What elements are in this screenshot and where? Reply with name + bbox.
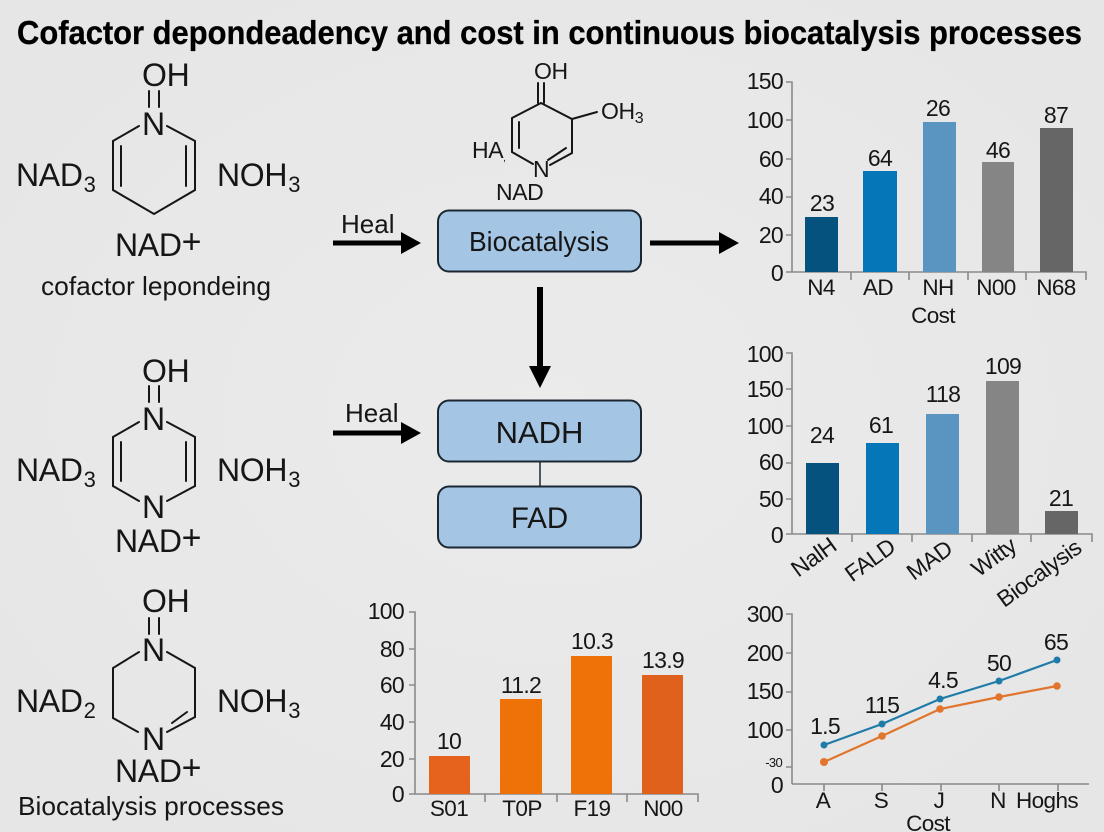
molecule: middle left NAD+ structure: OH [142,353,189,389]
bar chart: bottom center orange: S01 [430,796,468,821]
molecule: middle left NAD+ structure: + [182,519,201,557]
bar chart: top right cost: NH [922,275,954,300]
bar chart: middle right: 21 [1049,485,1073,511]
bar chart: bottom center orange: 40 [380,709,404,735]
bar chart: middle right: 60 [759,449,783,475]
bar chart: middle right: 150 [747,376,783,402]
bar chart: top right cost: N4 [807,275,835,300]
label: Heal (middle): Heal [345,398,398,428]
box: NADH: NADH [496,415,583,450]
bar chart: middle right: MAD [902,535,957,585]
caption: cofactor lepondeing: cofactor lepondeing [41,271,271,301]
bar chart: middle right: 109 [985,353,1021,379]
molecule: middle left NAD+ structure: 3 [84,467,96,492]
box: Biocatalysis [438,210,641,272]
line chart: bottom right: N [990,788,1006,813]
molecule: bottom left NAD+ structure: + [182,749,201,787]
line chart: bottom right: 65 [1044,629,1068,655]
bar chart: bottom center orange: T0P [502,796,542,821]
molecule: middle left NAD+ structure: NOH [217,452,287,488]
molecule: middle left NAD+ structure: 3 [288,467,300,492]
bar chart: middle right: 100 [747,413,783,439]
caption: Biocatalysis processes: Biocatalysis processes [18,791,284,821]
bar chart: bottom center orange: 10 [437,728,461,754]
molecule: center top structure: HA [472,137,503,163]
molecule: center top structure [472,58,644,205]
bar chart: top right cost: 46 [986,137,1010,163]
bar chart: top right cost: 60 [759,146,783,172]
bar chart: top right cost: 40 [759,183,783,209]
bar chart: top right cost: 87 [1044,102,1068,128]
bar chart: middle right: 118 [926,381,960,407]
bar chart: middle right: Witty [966,531,1022,582]
line chart: bottom right: 115 [865,692,899,718]
molecule: bottom left NAD+ structure: 2 [84,698,96,723]
bar chart: bottom center orange: N00 [643,796,683,821]
bar chart: middle right: Biocalysis [992,534,1086,612]
bar chart: middle right: FALD [840,533,900,587]
molecule: bottom left NAD+ structure: 3 [288,698,300,723]
molecule: top left NAD+ structure: NOH [217,157,287,193]
bar chart: middle right: 61 [869,412,893,438]
bar chart: bottom center orange: F19 [574,796,611,821]
box: NADH [438,400,641,462]
bar chart: top right cost: 150 [747,68,783,94]
bar chart: bottom center orange: 60 [380,672,404,698]
bar chart: middle right: 100 [747,341,783,367]
molecule: bottom left NAD+ structure: N [142,721,165,757]
line chart: bottom right: 50 [987,650,1011,676]
molecule: bottom left NAD+ structure: N [142,632,165,668]
line chart: bottom right: 150 [747,678,783,704]
molecule: top left NAD+ structure: + [182,223,201,261]
molecule: middle left NAD+ structure [16,353,300,559]
box: FAD [438,486,641,548]
molecule: bottom left NAD+ structure: NAD [16,683,83,719]
molecule: center top structure: , [503,153,506,164]
line chart: bottom right: 300 [747,601,783,627]
molecule: top left NAD+ structure: 3 [288,172,300,197]
bar chart: top right cost: AD [863,275,893,300]
molecule: middle left NAD+ structure: NAD [16,452,83,488]
arrow: Heal to Biocatalysis [333,232,421,254]
bar chart: top right cost: 64 [868,145,893,171]
molecule: bottom left NAD+ structure [16,583,300,789]
line chart: bottom right: A [816,788,831,813]
molecule: top left NAD+ structure: OH [142,57,189,93]
bar chart: bottom center orange: 80 [380,636,404,662]
bar chart: top right cost: 26 [926,95,950,121]
bar chart: middle right: 50 [759,486,783,512]
bar chart: top right cost: N00 [976,275,1016,300]
box: Biocatalysis: Biocatalysis [469,226,609,257]
bar chart: top right cost: 23 [810,190,834,216]
line chart: bottom right: Hoghs [1016,788,1078,813]
arrow: Biocatalysis to cost chart [650,232,739,254]
molecule: top left NAD+ structure: 3 [84,172,96,197]
molecule: middle left NAD+ structure: N [142,489,165,525]
bar chart: bottom center orange: 0 [392,781,404,807]
line chart: bottom right [747,601,1089,832]
bar chart: top right cost: 0 [771,260,783,286]
line chart: bottom right: 200 [747,640,783,666]
bar chart: middle right: NalH [786,532,841,582]
molecule: center top structure: NAD [496,179,543,205]
bar chart: top right cost: N68 [1036,275,1076,300]
molecule: middle left NAD+ structure: NAD [115,523,182,559]
bar chart: top right cost: 20 [759,222,783,248]
box: FAD: FAD [511,502,568,535]
molecule: top left NAD+ structure: NAD [16,157,83,193]
connector: NADH to FAD [539,462,541,486]
molecule: middle left NAD+ structure: N [142,401,165,437]
line chart: bottom right: -30 [765,755,782,770]
molecule: bottom left NAD+ structure: OH [142,583,189,619]
molecule: bottom left NAD+ structure: NOH [217,683,287,719]
bar chart: bottom center orange: 11.2 [501,672,541,698]
bar chart: middle right [747,341,1092,612]
bar chart: top right cost [747,68,1086,328]
line chart: bottom right: 100 [747,717,783,743]
bar chart: top right cost: 100 [747,107,783,133]
bar chart: bottom center orange: 20 [380,746,404,772]
molecule: top left NAD+ structure [16,57,300,263]
molecule: bottom left NAD+ structure: NAD [115,753,182,789]
label: Heal (top): Heal [341,209,394,239]
molecule: center top structure: OH [601,98,635,124]
line chart: bottom right: 4.5 [928,667,958,693]
line chart: bottom right: J [934,788,944,813]
molecule: center top structure: 3 [635,110,644,127]
bar chart: bottom center orange: 13.9 [642,647,684,673]
molecule: top left NAD+ structure: N [142,106,165,142]
molecule: top left NAD+ structure: NAD [115,227,182,263]
arrow: Biocatalysis down to NADH [529,287,551,388]
bar chart: middle right: 24 [810,422,835,448]
molecule: center top structure: N [533,156,549,182]
molecule: center top structure: OH [534,58,568,84]
bar chart: bottom center orange [368,598,698,821]
bar chart: bottom center orange: 100 [368,598,404,624]
bar chart: top right cost: Cost [911,303,956,328]
bar chart: bottom center orange: 10.3 [571,628,613,654]
line chart: bottom right: 0 [771,772,783,798]
line chart: bottom right: 1.5 [810,713,840,739]
bar chart: middle right: 0 [771,522,783,548]
line chart: bottom right: S [874,788,888,813]
arrow: Heal to NADH [333,422,421,444]
